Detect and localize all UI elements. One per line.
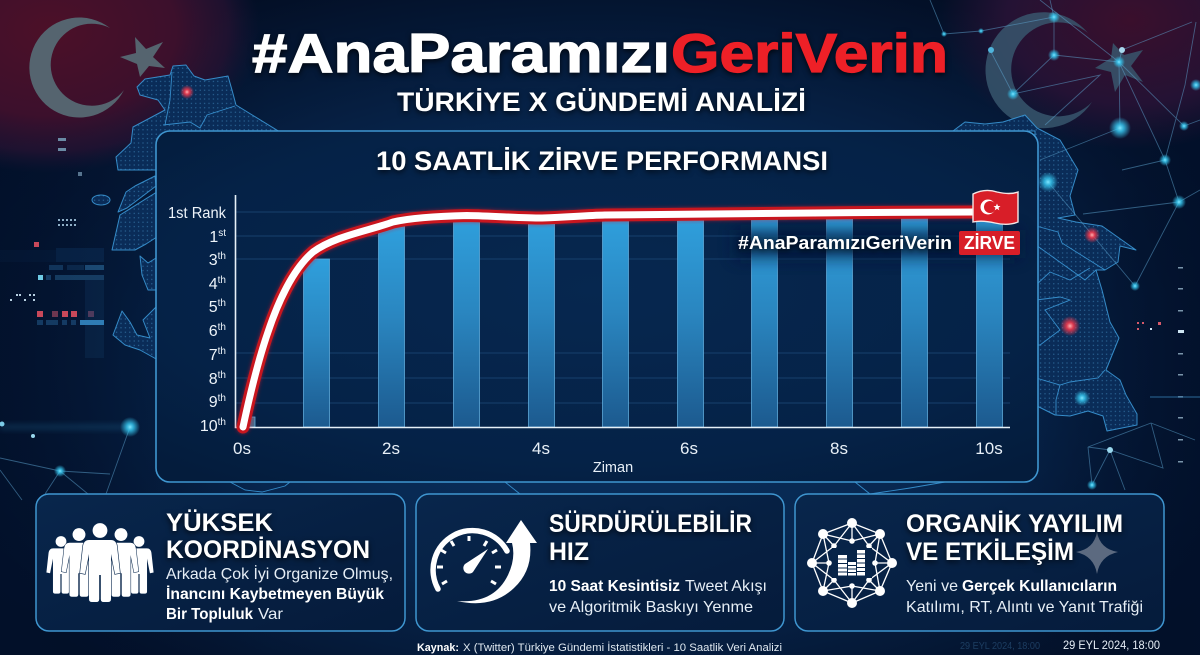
description: Katılımı, RT, Alıntı ve Yanıt Trafiği — [906, 599, 1143, 616]
badge: ZIRVE: ZİRVE — [964, 233, 1015, 253]
x axis tick labels: 4s — [532, 439, 550, 458]
icon: speedometer with arrow — [433, 520, 537, 603]
pixel data blocks left — [0, 138, 104, 358]
network nodes — [0, 11, 1200, 490]
label shadow — [735, 230, 1020, 258]
heading: YÜKSEK — [166, 508, 273, 537]
y axis rank labels: 8 — [209, 371, 218, 388]
crescent and star right — [985, 12, 1143, 128]
panel: organic reach — [795, 494, 1164, 631]
y axis rank labels: th — [218, 275, 226, 286]
description: Gerçek Kullanıcıların — [962, 578, 1117, 595]
y axis rank labels: 9 — [209, 394, 218, 411]
heading: VE ETKİLEŞİM — [906, 538, 1074, 566]
y axis rank labels: 7 — [209, 347, 218, 364]
header title: #AnaParamızı — [252, 22, 670, 84]
network lines — [0, 0, 1200, 500]
heading — [549, 509, 752, 566]
heading: SÜRDÜRÜLEBİLİR — [549, 509, 752, 538]
source note: Kaynak: — [417, 642, 459, 654]
map inner borders — [163, 72, 1105, 494]
header title — [252, 22, 948, 84]
heading: ORGANİK YAYILIM — [906, 510, 1123, 538]
x axis title: Ziman — [593, 460, 633, 476]
chart title: 10 SAATLİK ZİRVE PERFORMANSI — [376, 146, 828, 176]
y axis rank labels: th — [218, 251, 226, 262]
x axis tick labels: 6s — [680, 439, 698, 458]
y axis rank labels: 10 — [200, 418, 218, 435]
x axis tick labels: 0s — [233, 439, 251, 458]
x axis tick labels — [233, 439, 1003, 458]
description: 10 Saat Kesintisiz — [549, 578, 680, 595]
bars — [245, 218, 1002, 427]
y axis rank labels: 6 — [209, 323, 218, 340]
description: ve Algoritmik Baskıyı Yenme — [549, 599, 753, 616]
panel: sustainable speed — [416, 494, 784, 631]
y axis rank labels: th — [218, 370, 226, 381]
rank line — [243, 212, 975, 427]
y axis rank labels: 1 — [209, 229, 218, 246]
y axis rank labels: st — [218, 228, 226, 239]
y axis rank labels: th — [218, 417, 226, 428]
description — [166, 564, 393, 623]
x axis tick labels: 10s — [975, 439, 1003, 458]
y axis rank labels: th — [218, 346, 226, 357]
red flag backdrop right — [930, 0, 1200, 170]
y axis rank labels: 4 — [209, 276, 218, 293]
heading — [166, 508, 370, 564]
map of Turkey silhouette — [92, 65, 1137, 431]
description: İnancını Kaybetmeyen Büyük — [166, 585, 384, 603]
description — [906, 578, 1143, 616]
description: Tweet Akışı — [685, 578, 767, 595]
y axis rank labels: th — [218, 393, 226, 404]
pixel data blocks right — [1137, 267, 1200, 462]
icon: sparkle — [1076, 532, 1118, 574]
icon: Turkish flag marker — [973, 190, 1018, 224]
panel: chart — [156, 131, 1038, 482]
y axis rank labels — [168, 205, 227, 435]
axes — [236, 195, 1010, 428]
description: Var — [258, 606, 284, 623]
y axis rank labels: 3 — [209, 252, 218, 269]
icon: network with bars — [807, 518, 897, 608]
source note: X (Twitter) Türkiye Gündemi İstatistikleri - 10 Saatlik Veri Analizi — [463, 641, 782, 654]
description: Arkada Çok İyi Organize Olmuş, — [166, 564, 393, 583]
description: Bir Topluluk — [166, 606, 253, 623]
x axis tick labels: 8s — [830, 439, 848, 458]
header title: GeriVerin — [671, 22, 948, 84]
subtitle: TÜRKİYE X GÜNDEMİ ANALİZİ — [397, 87, 806, 117]
heading: HIZ — [549, 538, 589, 566]
date stamp: 29 EYL 2024, 18:00 — [1063, 638, 1160, 652]
red flag backdrop left — [0, 0, 270, 190]
y axis rank labels: th — [218, 322, 226, 333]
description — [549, 578, 767, 616]
y axis rank labels: th — [218, 298, 226, 309]
crescent and star left — [29, 18, 165, 118]
y axis rank labels: 1st Rank — [168, 205, 227, 222]
faint date stamp: 29 EYL 2024, 18:00 — [960, 641, 1040, 652]
description: Yeni ve — [906, 578, 958, 595]
icon: group of people — [46, 523, 154, 602]
chart hashtag label: #AnaParamızıGeriVerin — [738, 233, 952, 253]
panel: high coordination — [36, 494, 405, 631]
x axis tick labels: 2s — [382, 439, 400, 458]
y axis rank labels: 5 — [209, 299, 218, 316]
heading — [906, 510, 1123, 566]
heading: KOORDİNASYON — [166, 536, 370, 564]
